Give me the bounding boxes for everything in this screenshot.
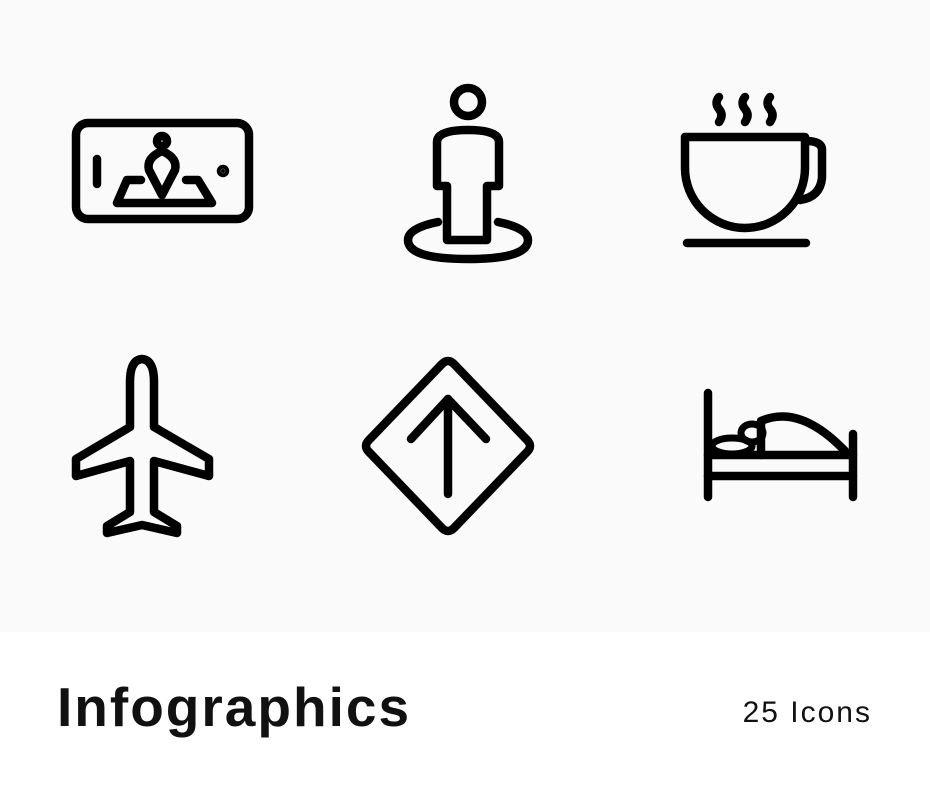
icon: airplane — [76, 359, 209, 533]
icon: coffee cup — [685, 97, 822, 243]
icon count label: 25 Icons — [743, 696, 872, 729]
icon: phone with map pin — [76, 123, 249, 219]
icon: person on spot — [408, 88, 528, 259]
icon: bed — [708, 393, 853, 497]
title: Infographics — [57, 676, 411, 738]
icon: diamond arrow sign — [366, 361, 530, 531]
